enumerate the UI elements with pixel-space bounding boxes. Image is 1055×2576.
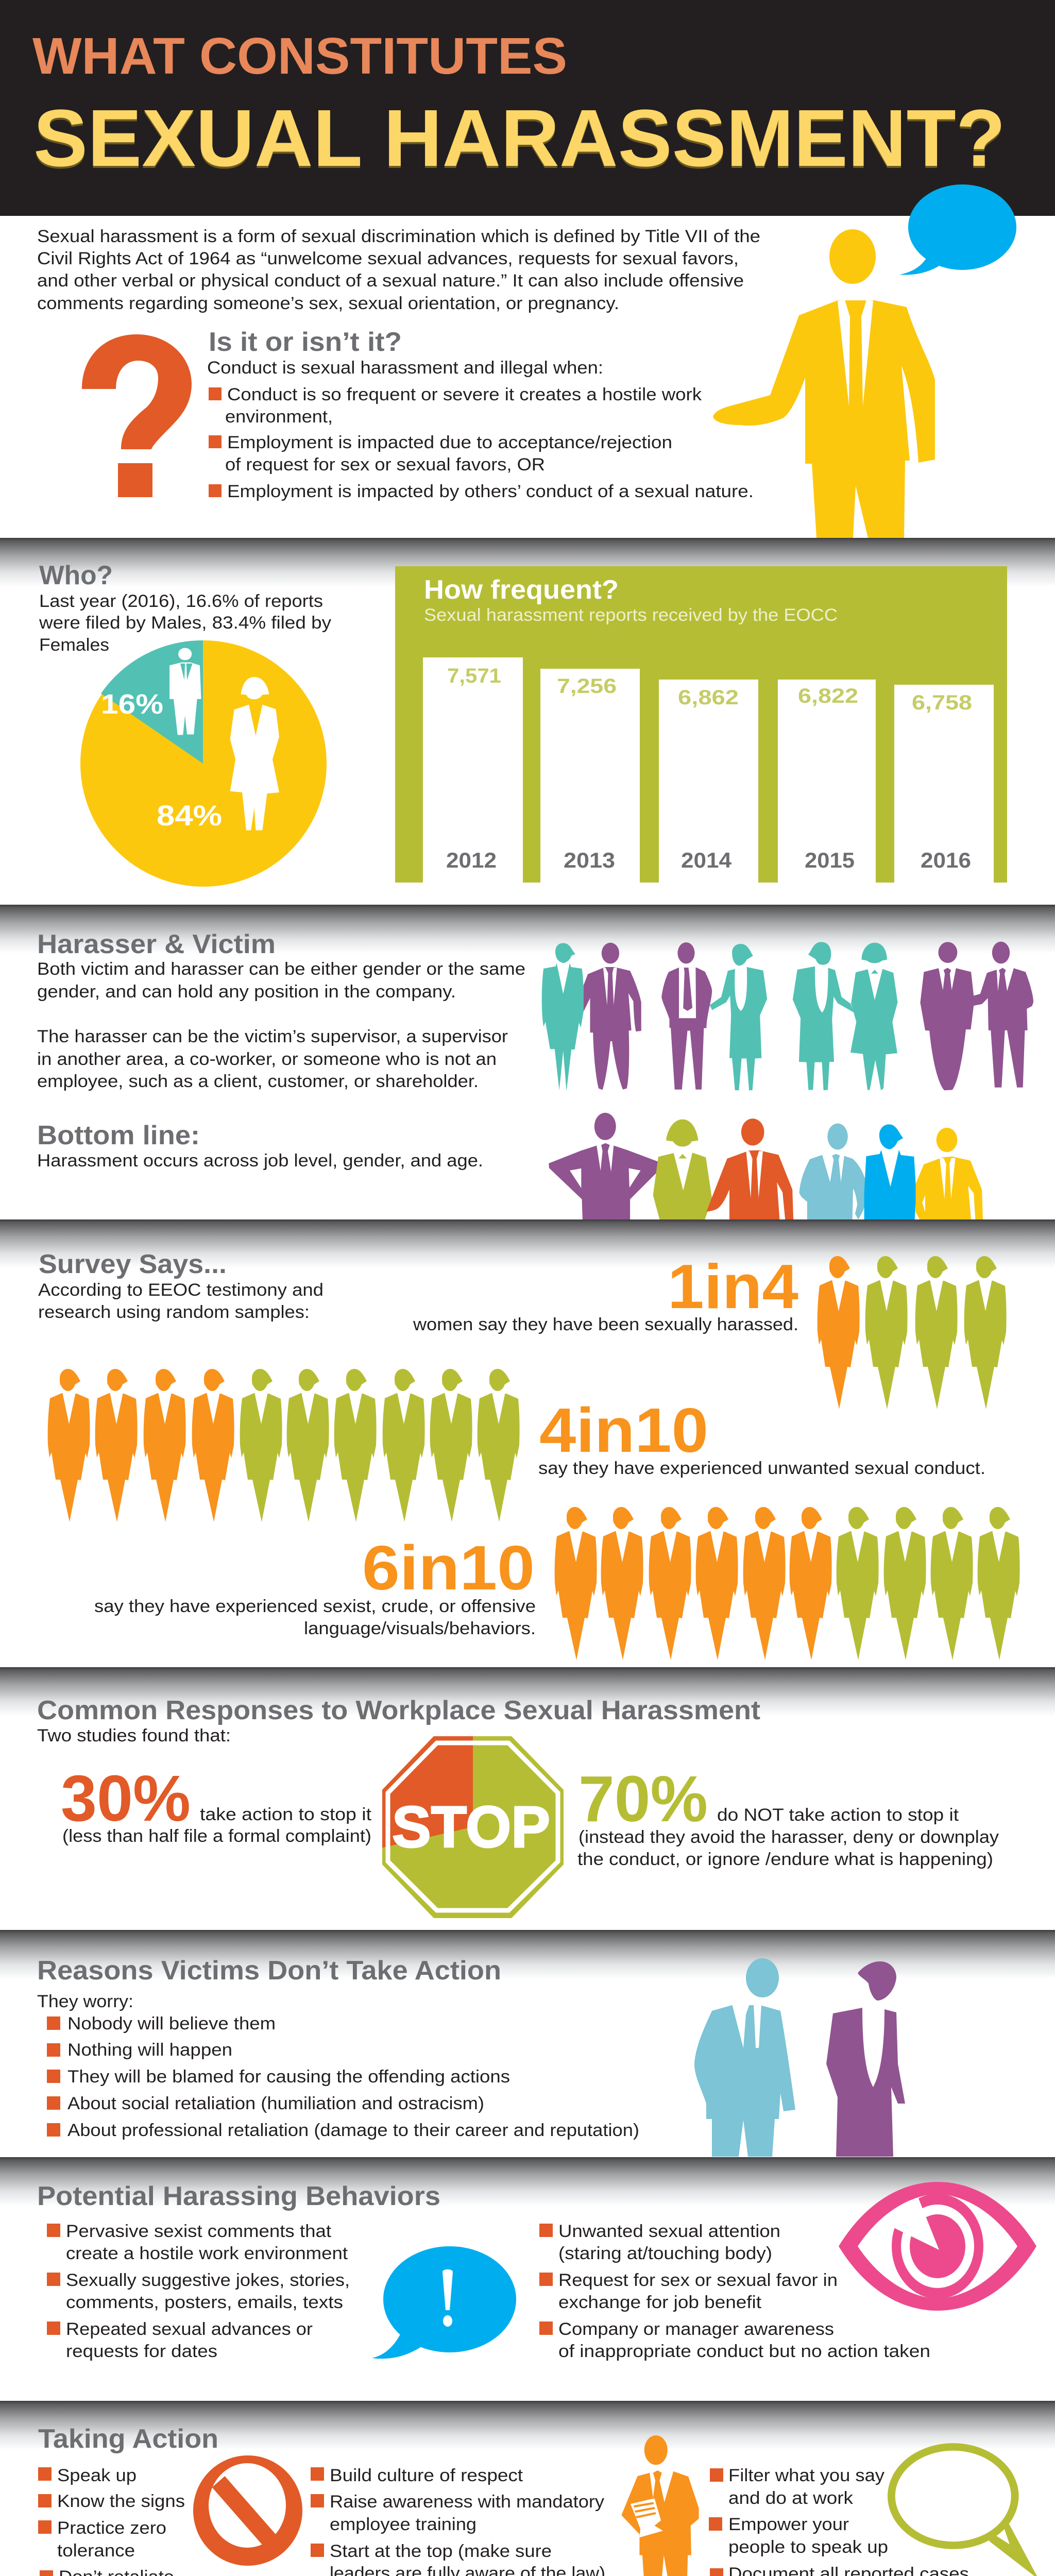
heading: how frequent: How frequent? <box>424 575 619 605</box>
paragraph: who the harasser can be: The harasser can be the victim’s supervisor, a supervisor <box>37 1027 508 1046</box>
paragraph: either gender: gender, and can hold any position in the company. <box>37 982 456 1002</box>
conditions list <box>207 358 754 501</box>
label: 84 percent: 84% <box>157 799 222 832</box>
icon: stop sign: STOP <box>392 1794 550 1859</box>
teal figure 5 <box>793 942 854 1090</box>
purple figure 3 <box>661 942 712 1090</box>
right behaviors list: Unwanted sexual attention <box>558 2222 780 2241</box>
paragraph: who the harasser can be: employee, such as a client, customer, or shareholder. <box>37 1072 479 1091</box>
intro paragraph: comments regarding someone’s sex, sexual orientation, or pregnancy. <box>37 294 619 313</box>
left action list: Know the signs <box>57 2492 185 2511</box>
right behaviors list <box>539 2222 930 2361</box>
bar 2013: 7,256 <box>557 675 617 698</box>
stat: 70 percent <box>577 1762 999 1869</box>
middle action list: employee training <box>330 2515 477 2534</box>
section shadow: who <box>0 538 1055 587</box>
conditions list: Employment is impacted by others’ conduct of a sexual nature. <box>227 482 754 501</box>
stat: 30 percent: (less than half file a formal complaint) <box>62 1826 371 1846</box>
figure: orange man with document <box>621 2435 699 2576</box>
panel: who <box>39 561 1007 887</box>
conditions list: Employment is impacted due to acceptance/rejection <box>227 433 672 452</box>
stat: 30 percent: take action to stop it <box>200 1805 372 1824</box>
paragraph: either gender <box>37 959 525 1002</box>
pie chart: gender split <box>80 640 327 887</box>
intro paragraph <box>37 227 760 313</box>
survey intro: research using random samples: <box>38 1302 310 1322</box>
panel: common responses <box>37 1696 999 1919</box>
who description: were filed by Males, 83.4% filed by <box>39 613 331 633</box>
bar 2012: 2012 <box>446 848 497 872</box>
pictogram: 6 in 10 <box>555 1507 1020 1660</box>
survey intro: According to EEOC testimony and <box>38 1280 324 1300</box>
bar 2015: 6,822 <box>798 685 858 707</box>
who description <box>39 591 331 655</box>
section shadow: behaviors <box>0 2157 1055 2206</box>
bar 2016 <box>894 685 994 883</box>
paragraph: who the harasser can be: in another area, a co-worker, or someone who is not an <box>37 1049 497 1069</box>
left behaviors list: Pervasive sexist comments that <box>66 2222 332 2241</box>
left action list: Practice zero <box>57 2518 166 2538</box>
right behaviors list: exchange for job benefit <box>558 2293 762 2312</box>
stat caption: 6 in 10 <box>94 1597 536 1638</box>
heading: reasons: Reasons Victims Don’t Take Action <box>37 1956 501 1986</box>
bar 2014 <box>659 680 758 883</box>
bar 2015 <box>778 680 876 883</box>
right action list: Empower your <box>728 2515 849 2534</box>
worry list: They will be blamed for causing the offending actions <box>67 2067 510 2087</box>
who description: Last year (2016), 16.6% of reports <box>39 591 323 611</box>
stat: 70 percent: (instead they avoid the harasser, deny or downplay <box>578 1827 999 1847</box>
header band <box>0 0 1055 216</box>
stat: 30 percent <box>61 1762 372 1846</box>
right behaviors list: Company or manager awareness <box>558 2319 834 2339</box>
teal figure 6 <box>850 943 898 1090</box>
pictogram: 4 in 10 <box>48 1369 520 1522</box>
section shadow: reasons <box>0 1930 1055 1979</box>
yellow figure <box>916 1128 983 1219</box>
stat caption: 6 in 10: language/visuals/behaviors. <box>304 1619 536 1638</box>
stat: 30 percent: 30% <box>61 1762 191 1835</box>
paragraph: either gender: Both victim and harasser can be either gender or the same <box>37 959 525 979</box>
figure: light blue man <box>694 1958 795 2157</box>
bar 2012: 7,571 <box>447 665 501 687</box>
conditions list: Conduct is sexual harassment and illegal when: <box>207 358 603 378</box>
right action list: Filter what you say <box>728 2466 884 2485</box>
left behaviors list: Sexually suggestive jokes, stories, <box>66 2270 350 2290</box>
middle action list: Build culture of respect <box>330 2466 523 2485</box>
intro paragraph: Sexual harassment is a form of sexual discrimination which is defined by Title VII of the <box>37 227 760 246</box>
stat: 70 percent: the conduct, or ignore /endure what is happening) <box>577 1850 993 1869</box>
icon: stop sign <box>381 1735 565 1919</box>
green figure <box>653 1120 712 1219</box>
middle action list <box>311 2466 605 2576</box>
purple figure hands on hips <box>549 1113 662 1219</box>
icon: exclamation speech bubble <box>372 2246 516 2359</box>
who description: Females <box>39 635 109 655</box>
middle action list: Start at the top (make sure <box>330 2541 552 2561</box>
bar 2014: 6,862 <box>678 686 739 709</box>
pictogram: 1 in 4 <box>818 1256 1007 1409</box>
left behaviors list: create a hostile work environment <box>66 2244 348 2263</box>
section shadow: harasser and victim <box>0 905 1055 954</box>
paragraph: who the harasser can be <box>37 1027 508 1091</box>
bar 2013: 2013 <box>564 848 615 872</box>
panel: introduction <box>37 184 1016 538</box>
panel: survey says <box>38 1249 1020 1660</box>
bar 2015: 2015 <box>805 848 855 872</box>
stat: 70 percent: do NOT take action to stop it <box>717 1805 959 1825</box>
purple figure 2 <box>584 943 641 1090</box>
worry list <box>47 2014 639 2140</box>
left action list: Speak up <box>57 2466 137 2485</box>
heading: survey says: Survey Says... <box>39 1249 227 1279</box>
teal figure 4 <box>710 944 767 1090</box>
middle action list: Raise awareness with mandatory <box>330 2492 604 2512</box>
heading: behaviors: Potential Harassing Behaviors <box>37 2181 440 2211</box>
title <box>32 27 1006 185</box>
heading: taking action: Taking Action <box>38 2424 218 2454</box>
left behaviors list: comments, posters, emails, texts <box>66 2293 343 2312</box>
bar 2016: 2016 <box>921 848 971 872</box>
icon: question mark <box>82 334 192 497</box>
title: SEXUAL HARASSMENT? <box>33 95 1006 185</box>
cyan figure <box>864 1124 916 1219</box>
section shadow: common responses <box>0 1667 1055 1716</box>
bar 2013 <box>540 669 640 883</box>
stat: 70 percent: 70% <box>578 1762 708 1835</box>
panel: harasser and victim <box>37 929 1033 1219</box>
panel: reasons victims don't take action <box>37 1956 905 2157</box>
intro paragraph: Civil Rights Act of 1964 as “unwelcome sexual advances, requests for sexual favors, <box>37 249 739 268</box>
they worry: They worry: <box>37 1992 133 2011</box>
title: WHAT CONSTITUTES <box>32 27 567 85</box>
stat caption: 6 in 10: say they have experienced sexist, crude, or offensive <box>94 1597 536 1616</box>
stat caption: 1 in 4: women say they have been sexually harassed. <box>413 1315 798 1334</box>
right action list: people to speak up <box>728 2537 888 2557</box>
orange figure <box>706 1118 793 1219</box>
worry list: Nobody will believe them <box>67 2014 276 2033</box>
heading: who: Who? <box>39 561 113 590</box>
icon: man in yellow suit <box>713 229 935 538</box>
figure: purple woman <box>826 1961 905 2157</box>
two studies line: Two studies found that: <box>37 1726 231 1745</box>
section shadow: taking action <box>0 2401 1055 2450</box>
right behaviors list: (staring at/touching body) <box>558 2244 772 2263</box>
worry list: About social retaliation (humiliation and ostracism) <box>67 2094 484 2113</box>
light blue figure <box>799 1124 867 1219</box>
worry list: Nothing will happen <box>67 2040 232 2060</box>
icon: female figure <box>230 677 279 830</box>
worry list: About professional retaliation (damage to their career and reputation) <box>67 2121 639 2140</box>
panel: how frequent bar chart <box>395 566 1007 883</box>
right behaviors list: of inappropriate conduct but no action taken <box>558 2342 930 2361</box>
purple figures 7 and 8 shaking hands <box>920 942 1033 1090</box>
right action list: and do at work <box>728 2488 854 2508</box>
conditions list: Conduct is so frequent or severe it creates a hostile work <box>227 385 702 404</box>
title: SEXUAL HARASSMENT? <box>33 93 1006 183</box>
panel: taking action <box>37 2424 1039 2576</box>
icon: green outline speech bubble <box>888 2443 1039 2576</box>
icon: blue speech bubble <box>899 184 1016 275</box>
right action list <box>709 2466 969 2576</box>
bar 2016: 6,758 <box>912 691 972 714</box>
icon: prohibition sign <box>193 2455 302 2566</box>
heading: harasser and victim: Harasser & Victim <box>37 929 276 959</box>
section shadow: survey says <box>0 1219 1055 1268</box>
left behaviors list: Repeated sexual advances or <box>66 2319 313 2339</box>
panel: potential harassing behaviors <box>37 2181 1036 2361</box>
icon: pink eye <box>839 2182 1036 2311</box>
heading: bottom line: Bottom line: <box>37 1121 200 1150</box>
stat: 6 in 10: 6in10 <box>362 1533 535 1603</box>
conditions list: environment, <box>225 407 333 427</box>
left action list: tolerance <box>57 2541 135 2561</box>
teal figure 1 <box>542 943 584 1091</box>
stat: 1 in 4: 1in4 <box>668 1251 798 1321</box>
stat: 4 in 10: 4in10 <box>539 1395 708 1465</box>
intro paragraph: and other verbal or physical conduct of a sexual nature.” It can also include offensive <box>37 271 744 291</box>
figures: bottom line group <box>549 1113 983 1219</box>
stat caption: 4 in 10: say they have experienced unwanted sexual conduct. <box>538 1459 985 1478</box>
survey intro <box>38 1280 324 1322</box>
heading: is it or isn't it: Is it or isn’t it? <box>209 327 402 357</box>
left action list <box>38 2466 232 2576</box>
figures: pairs of colleagues <box>542 942 1033 1091</box>
bar 2012 <box>423 657 523 883</box>
right behaviors list: Request for sex or sexual favor in <box>558 2270 838 2290</box>
bottom line text: Harassment occurs across job level, gender, and age. <box>37 1151 483 1171</box>
chart subtitle: Sexual harassment reports received by the EOCC <box>424 605 838 625</box>
bar 2014: 2014 <box>681 848 732 872</box>
left behaviors list: requests for dates <box>66 2342 217 2361</box>
label: 16 percent: 16% <box>101 689 163 720</box>
conditions list: of request for sex or sexual favors, OR <box>225 455 545 474</box>
heading: common responses: Common Responses to Workplace Sexual Harassment <box>37 1696 760 1725</box>
left behaviors list <box>47 2222 350 2361</box>
icon: male figure <box>169 648 201 735</box>
